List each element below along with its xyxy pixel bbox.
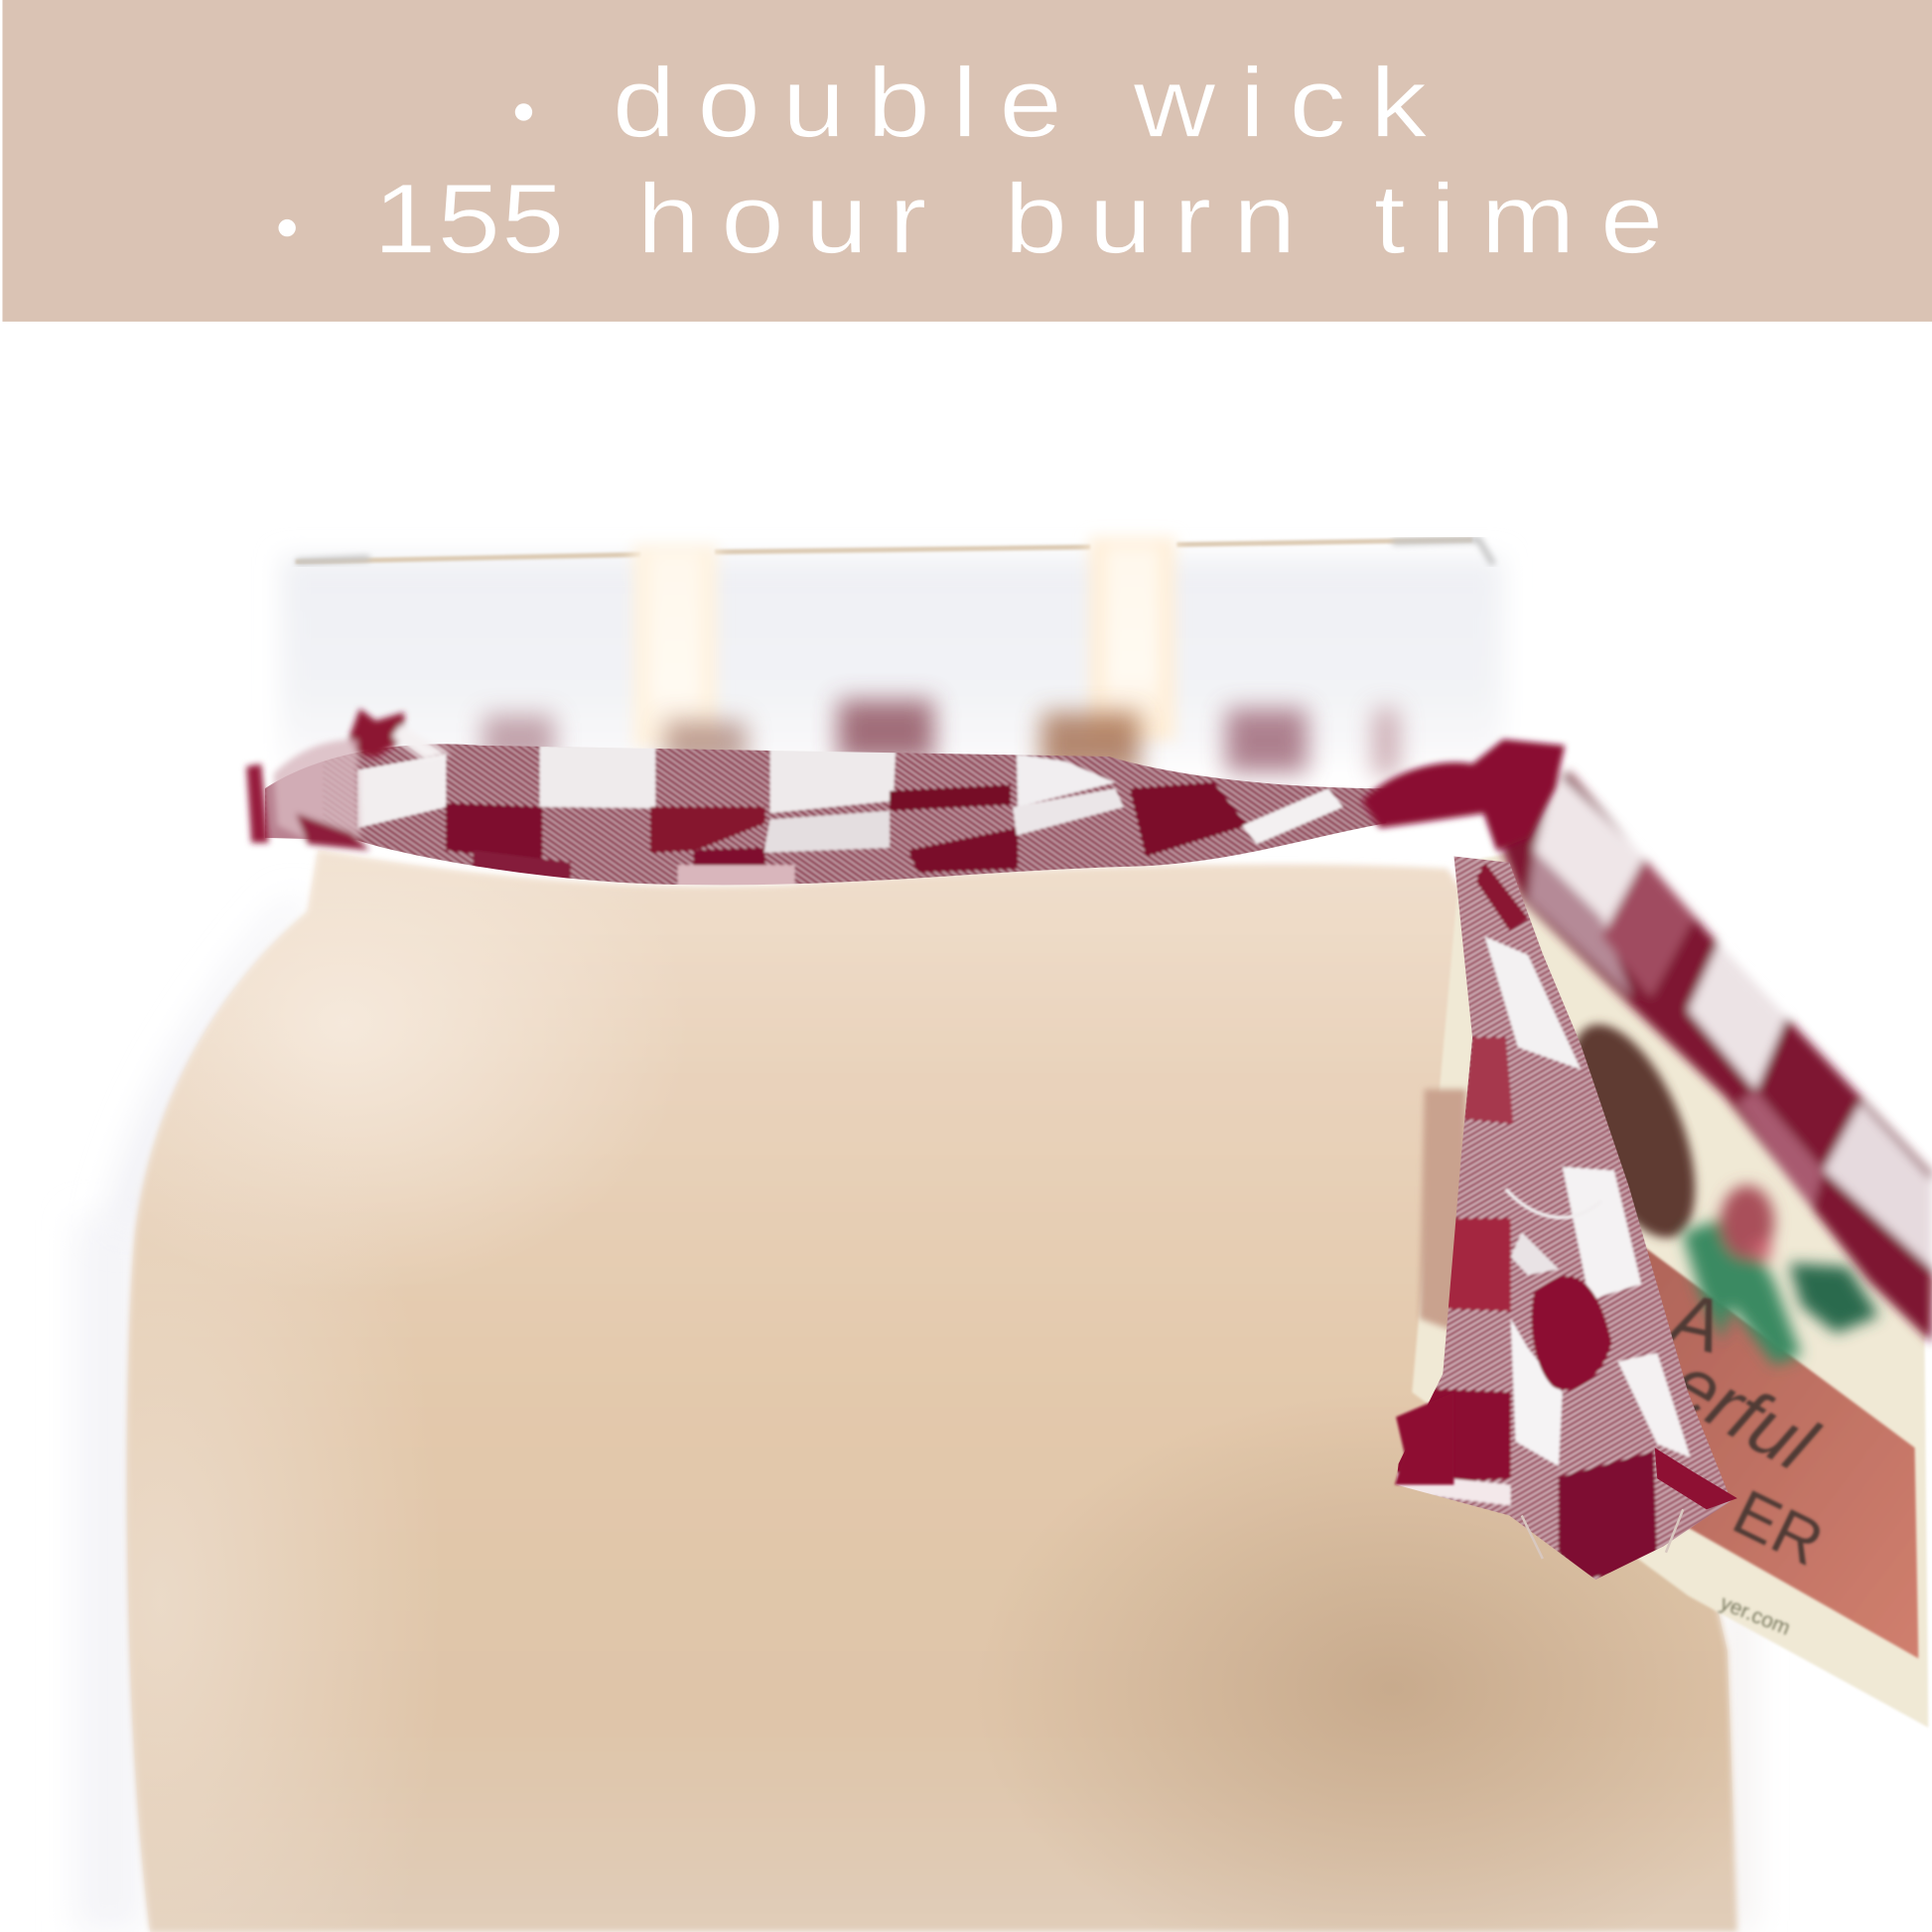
lower row dark checks	[446, 803, 542, 863]
text: double wick: double	[613, 48, 1062, 158]
text: 155 hour burn time: burn	[1004, 163, 1296, 274]
text: double wick	[515, 48, 1428, 158]
holly leaves and berries	[1682, 1185, 1879, 1365]
lower row white wedges	[763, 811, 890, 853]
top row white checks	[357, 755, 446, 828]
paper tag	[1412, 850, 1932, 1727]
text: 155 hour burn time	[278, 163, 1663, 274]
jar rim	[296, 540, 1472, 562]
tag lettering: yer.com	[1717, 1591, 1793, 1640]
tag lettering: A	[1658, 1275, 1729, 1370]
middle column white checks	[1484, 936, 1581, 1069]
ribbon knot	[1361, 740, 1565, 850]
text: double wick: wick	[1133, 48, 1428, 158]
tag lettering: ER	[1723, 1476, 1834, 1580]
left column checks	[1463, 1037, 1513, 1124]
ribbon lower tail	[1394, 856, 1737, 1580]
blurred wax and residue behind the ribbon	[483, 700, 1399, 776]
ribbon left ends	[246, 709, 450, 850]
ribbon fringe	[1655, 1448, 1737, 1509]
tag salmon band	[1601, 1242, 1918, 1658]
ribbon upper tail	[1466, 740, 1932, 1355]
flames seen through glass	[633, 537, 1175, 748]
tag lettering: erful	[1657, 1339, 1831, 1488]
text: 155 hour burn time: time	[1374, 163, 1663, 274]
header banner	[2, 0, 1932, 322]
gingham ribbon band	[264, 744, 1386, 886]
text: 155 hour burn time: 155	[373, 163, 564, 274]
text: 155 hour burn time: hour	[637, 163, 926, 274]
wax body	[123, 850, 1737, 1932]
middle column dark checks	[1532, 1277, 1611, 1390]
tag lettering	[1657, 1275, 1834, 1640]
candle jar glass	[76, 540, 1752, 1932]
pine cone illustration	[1545, 1008, 1721, 1255]
